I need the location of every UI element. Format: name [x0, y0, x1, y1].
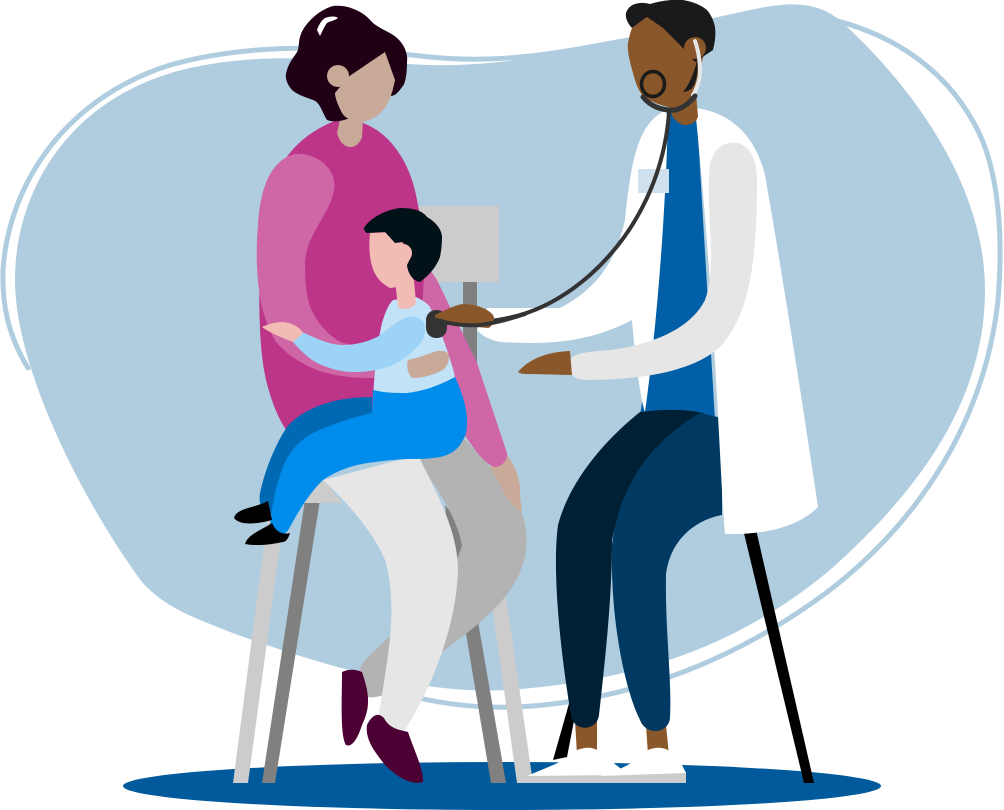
mother front shoe: [367, 715, 423, 783]
child: [234, 208, 467, 545]
child back shoe: [234, 501, 272, 524]
mother hair back: [286, 6, 407, 121]
doctor: [426, 0, 818, 783]
doctor ear: [684, 37, 706, 59]
mother hair highlight: [317, 16, 338, 36]
stool: [233, 480, 533, 783]
mother back leg: [357, 437, 527, 697]
doctor head: [628, 17, 706, 108]
doctor front leg: [612, 413, 722, 731]
doctor right stool leg: [742, 525, 814, 783]
child ear: [394, 244, 412, 262]
doctor shoe soles: [522, 772, 686, 783]
doctor coat front: [695, 108, 818, 534]
mother torso: [259, 119, 460, 440]
mother hand: [490, 455, 522, 512]
mother face: [335, 52, 395, 122]
doctor left stool leg: [553, 700, 578, 760]
child front shoe: [245, 523, 290, 545]
doctor coat badge: [638, 169, 669, 193]
mother hand on child: [407, 351, 449, 378]
stethoscope tube over hand: [437, 314, 525, 325]
doctor hair: [626, 0, 715, 62]
ground ellipse: [123, 762, 881, 810]
doctor hand lower: [518, 351, 572, 375]
mother front leg: [323, 455, 458, 733]
child pants: [270, 377, 467, 535]
child torso: [373, 297, 455, 397]
child left hand: [262, 322, 303, 342]
stethoscope crescent: [643, 96, 695, 110]
doctor shirt: [640, 112, 715, 420]
stethoscope ear tube: [693, 41, 700, 95]
doctor coat back: [477, 110, 668, 412]
child back leg: [260, 397, 372, 515]
doctor sideburn: [683, 59, 698, 92]
child face: [369, 232, 414, 288]
doctor ankles: [575, 720, 597, 755]
mother: [257, 6, 527, 783]
mother ear: [327, 65, 349, 87]
mother back shoe: [342, 670, 368, 746]
doctor back leg: [556, 410, 705, 728]
child neck: [395, 280, 416, 309]
blood pressure stand: [418, 206, 499, 400]
doctor neck: [668, 92, 698, 125]
child arm: [293, 317, 425, 372]
mother near arm: [257, 154, 407, 380]
child hair: [364, 208, 442, 282]
stethoscope chest piece: [426, 310, 447, 338]
mother neck: [337, 110, 363, 147]
stethoscope: [445, 72, 695, 323]
stethoscope ring: [642, 72, 664, 96]
doctor sleeve: [569, 142, 757, 380]
doctor right shoe: [600, 748, 686, 776]
stethoscope tube: [445, 112, 669, 323]
doctor hand upper: [435, 304, 494, 328]
mother far arm: [420, 262, 507, 467]
doctor left shoe: [527, 748, 622, 776]
